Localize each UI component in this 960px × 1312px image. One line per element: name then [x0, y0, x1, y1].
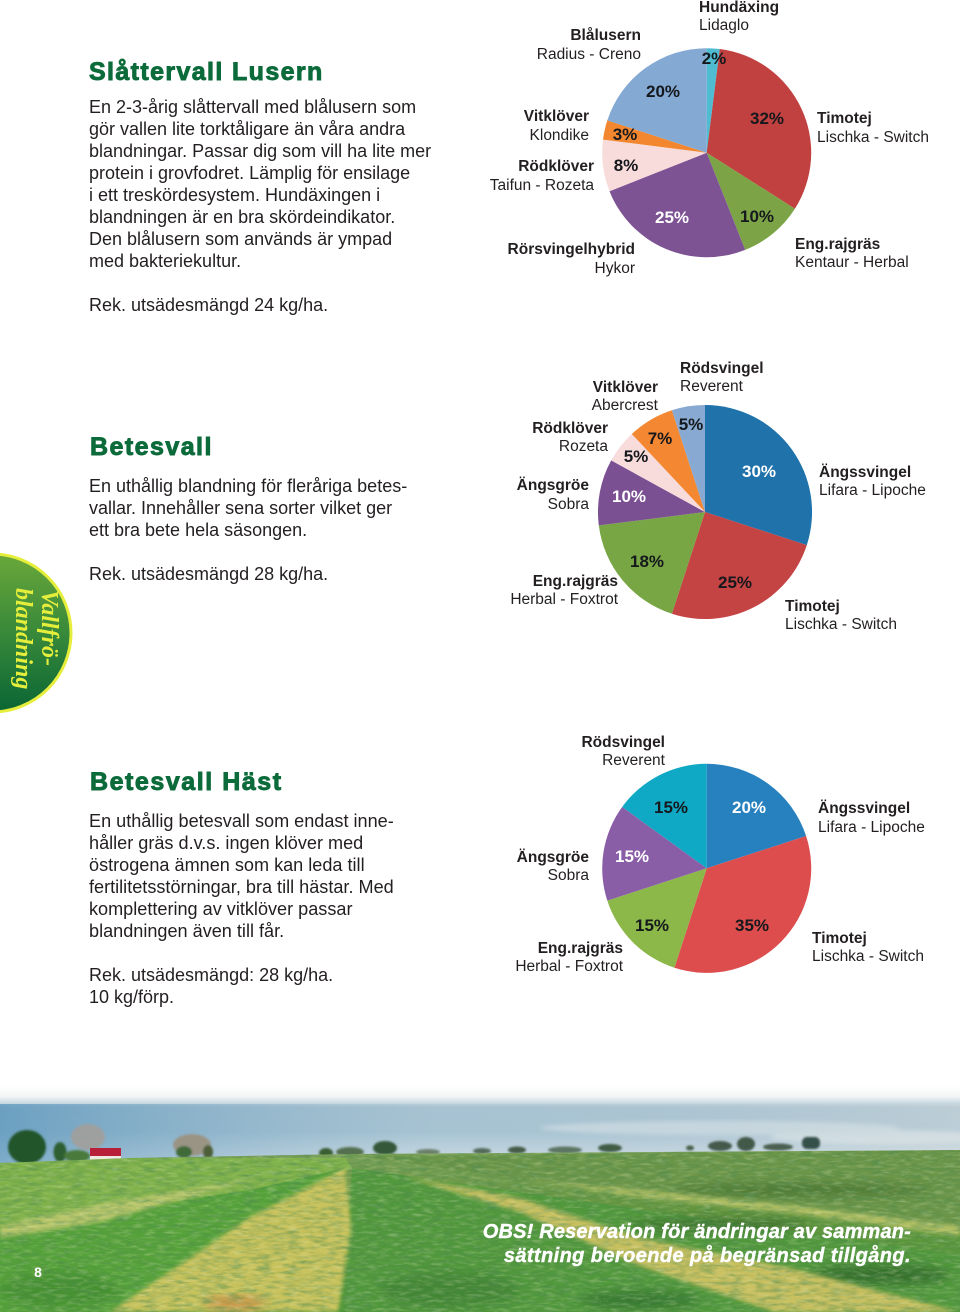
text block: description: blandningen även till får. [89, 921, 284, 941]
label: Vitklöver [592, 379, 659, 414]
label: Ängssvingel: Ängssvingel [819, 464, 911, 481]
text block: description [89, 811, 394, 941]
label: Ängssvingel [818, 800, 925, 836]
label: Rörsvingelhybrid: Hykor [595, 260, 635, 277]
badge: Vallfröblandning: Vallfrö- [36, 590, 62, 666]
label: Ängsgröe [517, 849, 589, 884]
label: Ängsgröe: Sobra [548, 496, 589, 513]
label: Blålusern: Radius - Creno [537, 46, 641, 63]
pie chart: Slåttervall Lusern: 3% [613, 125, 637, 144]
text: seed rate [89, 965, 333, 1007]
label: Rödsvingel: Reverent [602, 752, 666, 769]
text block: description: fertilitetsstörningar, bra till hästar. Med [89, 877, 394, 897]
text block: description: En uthållig blandning för fleråriga betes- [89, 476, 407, 496]
label: Eng.rajgräs: Eng.rajgräs [795, 236, 880, 253]
label: Rödsvingel [680, 360, 764, 395]
label: Ängssvingel [819, 464, 926, 499]
heading: Betesvall: Betesvall [90, 433, 213, 461]
pie chart: Betesvall: 10% [612, 487, 646, 506]
heading: Slåttervall Lusern: Slåttervall Lusern [89, 58, 324, 86]
label: Rörsvingelhybrid: Rörsvingelhybrid [508, 241, 635, 258]
pie chart: Slåttervall Lusern: 32% [750, 109, 784, 128]
panel: Betesvall [89, 360, 926, 633]
label: Timotej [817, 110, 929, 146]
pie chart: Slåttervall Lusern [602, 48, 811, 257]
label: Blålusern: Blålusern [570, 27, 641, 44]
callout: OBS reservation: OBS! Reservation för ändringar av samman- [483, 1221, 911, 1243]
pie chart: Betesvall Häst: 15% [635, 916, 669, 935]
label: Ängssvingel: Ängssvingel [818, 800, 910, 817]
label: Eng.rajgräs: Eng.rajgräs [538, 940, 623, 957]
text: seed rate: Rek. utsädesmängd: 28 kg/ha. [89, 965, 333, 985]
pie chart: Betesvall [598, 405, 812, 619]
pie chart: Betesvall: 30% [742, 462, 776, 481]
text block: description: östrogena ämnen som kan leda till [89, 855, 365, 875]
pie chart: Betesvall: 7% [648, 429, 672, 448]
label: Ängsgröe: Sobra [548, 867, 589, 884]
badge: Vallfröblandning [0, 554, 71, 712]
pie chart: Slåttervall Lusern: 25% [655, 208, 689, 227]
text block: description: Den blålusern som används är ympad [89, 229, 392, 249]
pie chart: Slåttervall Lusern: 10% [740, 207, 774, 226]
label: Eng.rajgräs: Herbal - Foxtrot [510, 591, 619, 608]
pie chart: Betesvall: 18% [630, 552, 664, 571]
label: Eng.rajgräs [510, 573, 619, 608]
text block: description [89, 476, 407, 540]
pie chart: Slåttervall Lusern: 2% [702, 49, 726, 68]
pie chart: Slåttervall Lusern: 8% [614, 156, 638, 175]
text block: description: komplettering av vitklöver passar [89, 899, 352, 919]
pie chart: Betesvall: 5% [679, 415, 703, 434]
callout: OBS reservation [483, 1221, 911, 1267]
pie chart: Betesvall Häst: 15% [615, 847, 649, 866]
text: seed rate: 10 kg/förp. [89, 987, 174, 1007]
pie chart: Betesvall Häst: 20% [732, 798, 766, 817]
label: Ängsgröe: Ängsgröe [517, 849, 589, 866]
label: Rödklöver: Rödklöver [518, 158, 594, 175]
text block: description: protein i grovfodret. Lämplig för ensilage [89, 163, 410, 183]
callout: OBS reservation: sättning beroende på begränsad tillgång. [504, 1244, 911, 1267]
label: Hundäxing: Lidaglo [699, 17, 749, 34]
label: Rörsvingelhybrid [508, 241, 635, 277]
label: Rödklöver [490, 158, 594, 194]
label: Rödklöver: Rödklöver [532, 420, 608, 437]
label: Ängsgröe: Ängsgröe [517, 477, 589, 494]
label: Eng.rajgräs [515, 940, 624, 975]
label: Ängssvingel: Lifara - Lipoche [819, 482, 926, 499]
photo: mown field under a blue sky [0, 1085, 960, 1312]
panel: Betesvall Häst [89, 734, 925, 1007]
label: Timotej [812, 930, 924, 965]
label: Timotej: Lischka - Switch [785, 616, 897, 633]
label: Rödklöver: Rozeta [559, 438, 608, 455]
label: Timotej: Timotej [812, 930, 867, 947]
label: Rödsvingel [581, 734, 666, 769]
panel: Slåttervall Lusern [89, 0, 929, 315]
label: Vitklöver: Vitklöver [593, 379, 658, 396]
label: Timotej: Timotej [817, 110, 872, 127]
label: Eng.rajgräs: Eng.rajgräs [533, 573, 618, 590]
page number: 8 [34, 1264, 42, 1280]
heading: Betesvall Häst: Betesvall Häst [90, 768, 283, 796]
label: Eng.rajgräs [795, 236, 909, 271]
label: Ängssvingel: Lifara - Lipoche [818, 819, 925, 836]
pie chart: Betesvall: 5% [624, 447, 648, 466]
label: Vitklöver: Abercrest [592, 397, 659, 414]
text block: description: ett bra bete hela säsongen. [89, 520, 307, 540]
label: Rödklöver: Taifun - Rozeta [490, 177, 594, 194]
text block: description: blandningen är en bra skördeindikator. [89, 207, 395, 227]
badge: Vallfröblandning: blandning [10, 588, 36, 689]
label: Eng.rajgräs: Herbal - Foxtrot [515, 958, 624, 975]
text block: description: med bakteriekultur. [89, 251, 241, 271]
text block: description: håller gräs d.v.s. ingen klöver med [89, 833, 363, 853]
label: Vitklöver: Klondike [530, 127, 589, 144]
label: Eng.rajgräs: Kentaur - Herbal [795, 254, 909, 271]
text block: description: gör vallen lite torktåligare än våra andra [89, 119, 406, 139]
label: Hundäxing [699, 0, 779, 34]
label: Timotej [785, 598, 897, 633]
text block: description: i ett treskördesystem. Hundäxingen i [89, 185, 380, 205]
label: Rödklöver [532, 420, 608, 455]
pie chart: Betesvall: 25% [718, 573, 752, 592]
text: seed rate: Rek. utsädesmängd 24 kg/ha. [89, 295, 328, 315]
text: seed rate: Rek. utsädesmängd 28 kg/ha. [89, 564, 328, 584]
label: Ängsgröe [517, 477, 589, 513]
label: Vitklöver: Vitklöver [524, 108, 589, 125]
label: Timotej: Lischka - Switch [812, 948, 924, 965]
label: Blålusern [537, 27, 641, 63]
label: Rödsvingel: Rödsvingel [581, 734, 665, 751]
pie chart: Betesvall Häst: 15% [654, 798, 688, 817]
photo detail: red barn [90, 1148, 121, 1161]
label: Rödsvingel: Reverent [680, 378, 744, 395]
label: Rödsvingel: Rödsvingel [680, 360, 764, 377]
pie chart: Betesvall Häst [602, 764, 811, 973]
text block: description: En 2-3-årig slåttervall med blålusern som [89, 97, 416, 117]
text block: description: En uthållig betesvall som endast inne- [89, 811, 394, 831]
label: Vitklöver [524, 108, 589, 144]
text block: description: vallar. Innehåller sena sorter vilket ger [89, 498, 392, 518]
pie chart: Slåttervall Lusern: 20% [646, 82, 680, 101]
label: Timotej: Timotej [785, 598, 840, 615]
text block: description [89, 97, 431, 271]
pie chart: Betesvall Häst: 35% [735, 916, 769, 935]
label: Timotej: Lischka - Switch [817, 129, 929, 146]
text block: description: blandningar. Passar dig som vill ha lite mer [89, 141, 431, 161]
